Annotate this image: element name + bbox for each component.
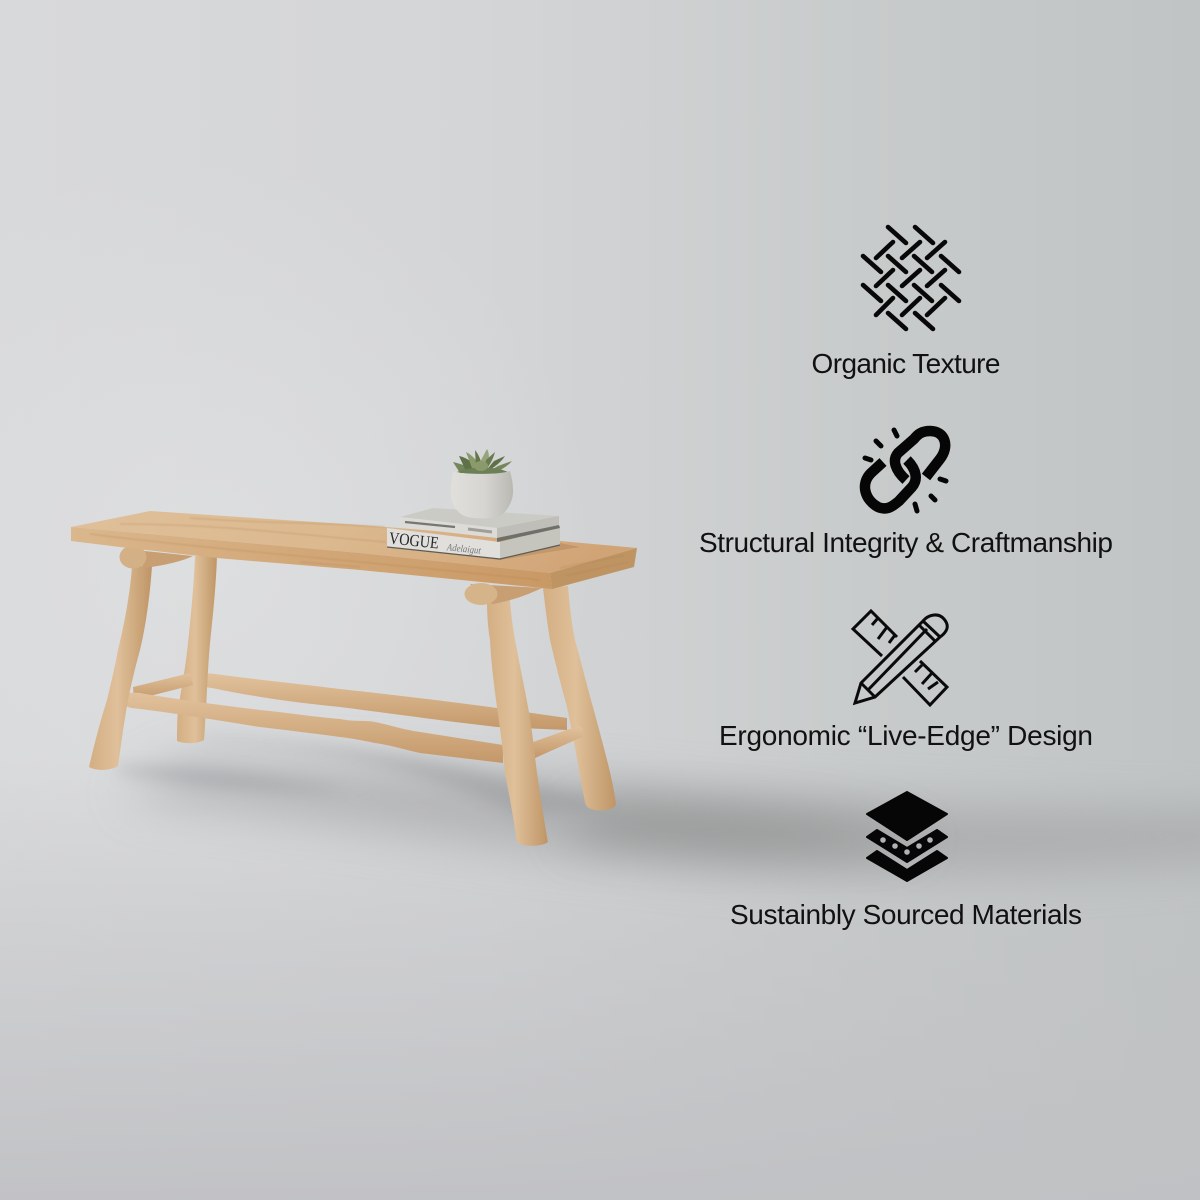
front right leg (487, 600, 548, 846)
feature: sustainable materials (730, 792, 1082, 930)
floor shadow (118, 735, 1200, 872)
feature: organic texture (812, 227, 1000, 379)
bench (71, 511, 637, 846)
bench seat top (71, 511, 637, 573)
books (387, 508, 580, 560)
label: structural integrity: Structural Integrity & Craftmanship (699, 527, 1113, 558)
icon: woven texture (863, 227, 959, 329)
icon: material layers (867, 792, 947, 881)
cover subtitle: Adelaigut (445, 542, 482, 557)
label: sustainable materials: Sustainbly Sourced Materials (730, 899, 1082, 930)
feature: structural integrity (699, 430, 1113, 558)
front left leg (89, 566, 152, 770)
label: organic texture: Organic Texture (812, 348, 1000, 379)
left mounting block (120, 546, 193, 568)
bench seat front edge (71, 527, 552, 589)
icon: pencil and ruler (853, 611, 947, 705)
right mounting block (464, 583, 542, 605)
right cross rail (533, 726, 583, 758)
pot (451, 471, 513, 518)
bench seat side edge (550, 548, 637, 589)
wood grain (90, 518, 628, 580)
book shadow (387, 543, 580, 560)
icon: chain link (865, 430, 946, 511)
left cross rail (133, 673, 193, 700)
back left leg (177, 556, 217, 743)
VOGUE cover text: VOGUE (388, 528, 440, 553)
upper book (400, 508, 560, 542)
back stretcher (199, 674, 567, 730)
potted succulent (451, 449, 513, 518)
front stretcher (123, 693, 503, 763)
lower book (387, 527, 560, 559)
succulent (453, 449, 512, 474)
back right leg (543, 586, 616, 811)
feature: ergonomic design (719, 611, 1093, 751)
label: ergonomic design: Ergonomic “Live-Edge” Design (719, 720, 1093, 751)
